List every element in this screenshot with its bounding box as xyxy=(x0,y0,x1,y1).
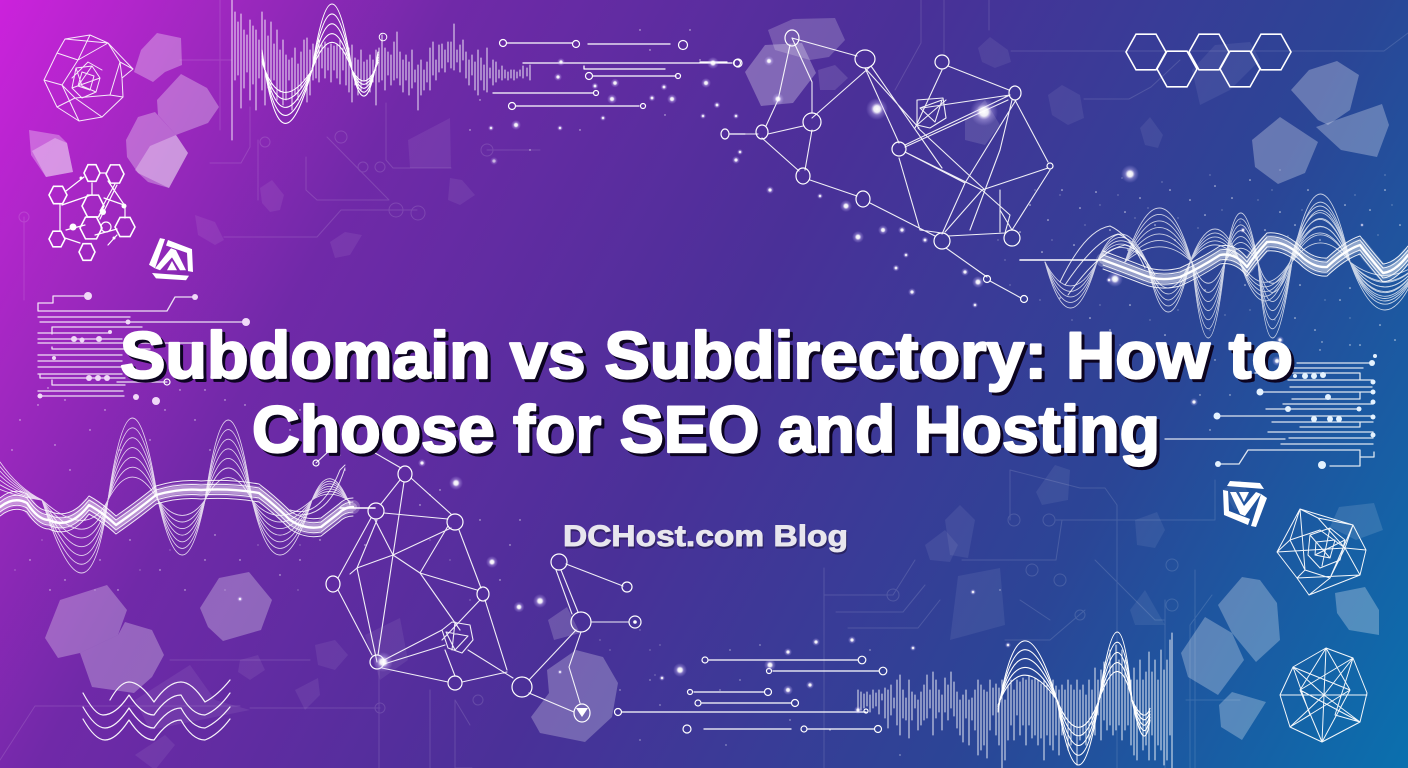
right circuit traces xyxy=(1165,354,1377,469)
translucent polygons: bottom right xyxy=(1181,503,1383,740)
icon: wireframe polyhedron top left xyxy=(44,35,133,121)
zigzag wave lines bottom left xyxy=(83,680,230,740)
network diagram top right xyxy=(700,30,1053,302)
hexagon chain top right xyxy=(1126,34,1291,87)
icon: abstract A badge xyxy=(149,238,193,280)
right wave ribbon xyxy=(1020,194,1408,338)
title: Choose for SEO and Hosting xyxy=(252,392,1160,466)
left circuit traces xyxy=(38,292,250,405)
translucent polygons: bottom left xyxy=(45,572,618,742)
icon: hexagon network top left xyxy=(49,165,135,260)
network diagram bottom left xyxy=(313,450,641,722)
top waveform: spikes and sine family xyxy=(232,0,530,140)
icon: abstract V badge xyxy=(1223,481,1267,527)
bottom waveform: spikes and sine family xyxy=(858,632,1172,768)
bottom centre node traces xyxy=(614,656,887,733)
glowing particles xyxy=(237,56,1364,714)
subtitle: DCHost.com Blog xyxy=(563,520,848,553)
faint background blobs xyxy=(135,37,1260,768)
icon: wireframe polyhedron right xyxy=(1277,509,1366,595)
icon: wireframe polyhedron lower right xyxy=(1280,648,1367,742)
translucent polygons: top left xyxy=(29,33,219,188)
translucent polygons: top right xyxy=(745,18,1389,184)
bottom left wave ribbon xyxy=(0,418,375,573)
title xyxy=(120,318,1293,466)
top centre node traces xyxy=(493,40,745,134)
title: Subdomain vs Subdirectory: How to xyxy=(120,318,1293,392)
